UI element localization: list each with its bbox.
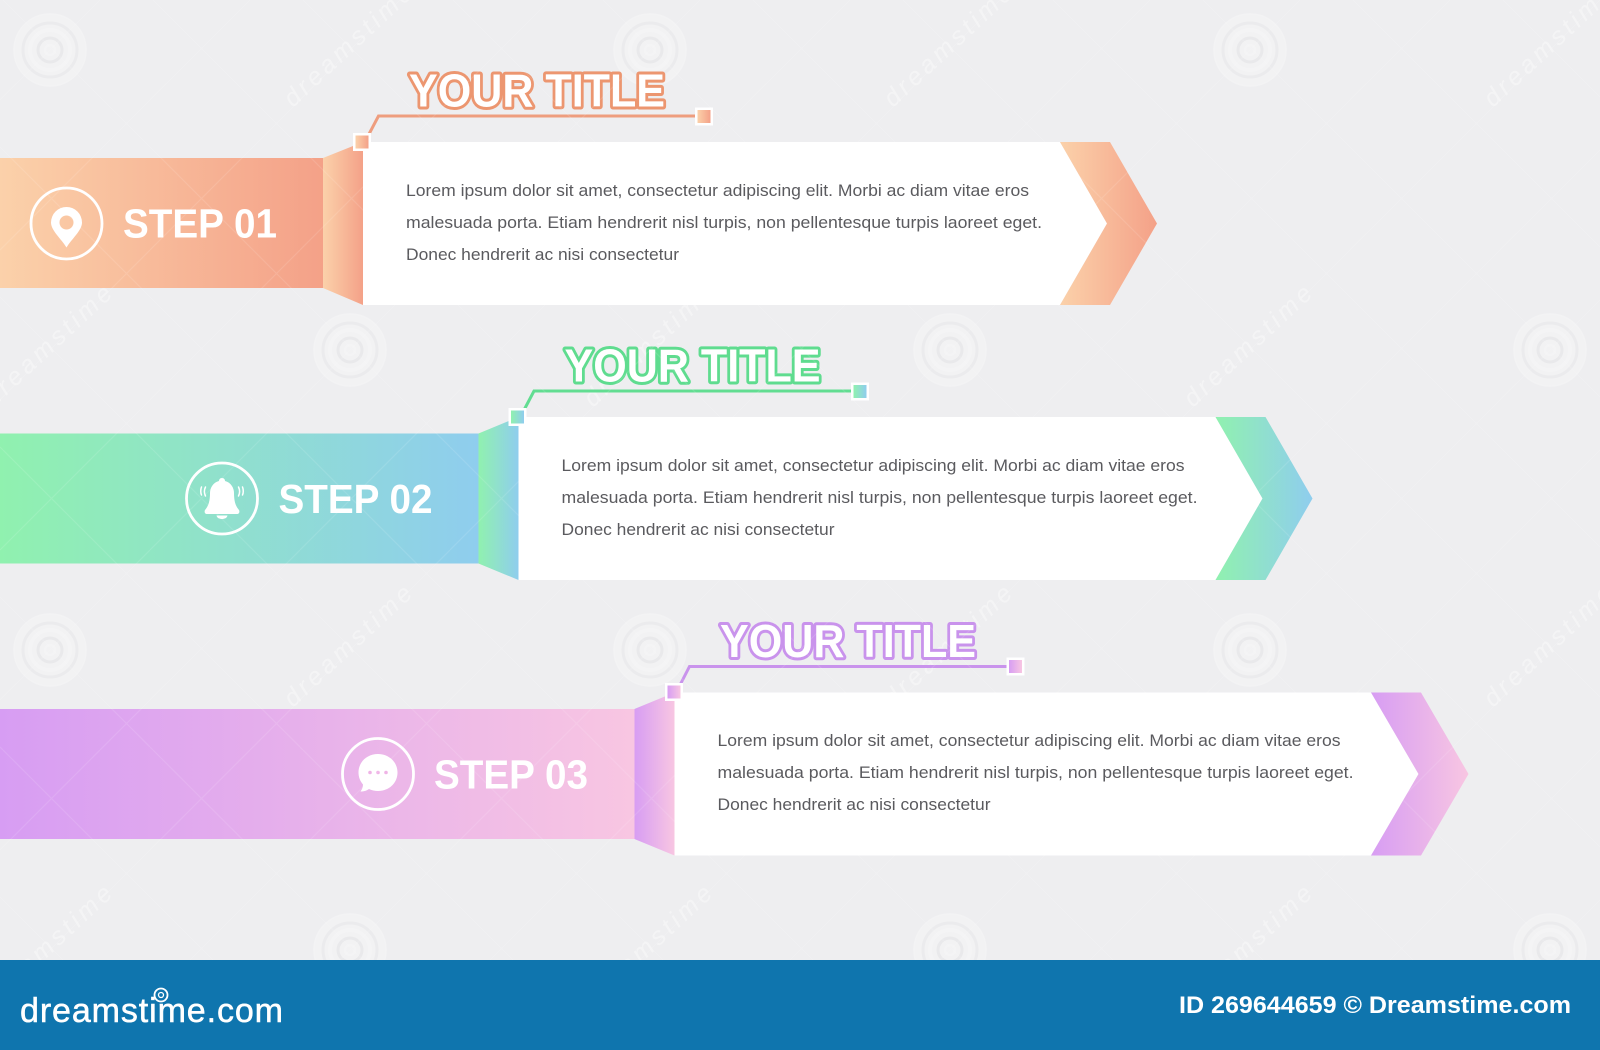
step 02 body text bbox=[562, 456, 1198, 539]
step 02 text card bbox=[518, 417, 1262, 580]
step 01 body text: malesuada porta. Etiam hendrerit nisl turpis, non pellentesque turpis laoreet eget. bbox=[406, 213, 1042, 232]
step 03 title: YOUR TITLE bbox=[720, 615, 976, 667]
step 03 band bbox=[0, 709, 634, 839]
step 01 title: YOUR TITLE bbox=[409, 64, 665, 116]
watermark pattern: dreamstime bbox=[578, 879, 718, 1012]
watermark pattern: dreamstime bbox=[1178, 879, 1318, 1012]
step 02 connector bbox=[508, 382, 869, 426]
icon: bell bbox=[186, 463, 258, 534]
step 03 body text bbox=[718, 731, 1354, 814]
step 02 fold bbox=[478, 417, 518, 580]
icon: location pin bbox=[31, 188, 102, 259]
step 03 connector bbox=[665, 658, 1024, 701]
step 03 body text: malesuada porta. Etiam hendrerit nisl turpis, non pellentesque turpis laoreet eget. bbox=[718, 763, 1354, 782]
step 02 arrow bbox=[1216, 417, 1312, 580]
step 03 arrow bbox=[1371, 692, 1468, 856]
step 02 title: YOUR TITLE bbox=[564, 340, 820, 392]
step 03 body text: Lorem ipsum dolor sit amet, consectetur adipiscing elit. Morbi ac diam vitae eros bbox=[718, 731, 1340, 750]
step 01 body text: Donec hendrerit ac nisi consectetur bbox=[406, 245, 679, 264]
watermark pattern: dreamstime bbox=[278, 579, 418, 712]
panel: step 01 bbox=[0, 64, 1157, 305]
panel: step 02 bbox=[0, 340, 1312, 580]
step 01 arrow bbox=[1060, 142, 1157, 305]
footer bar bbox=[0, 960, 1600, 1050]
step 01 band bbox=[0, 158, 323, 288]
step 02 label: STEP 02 bbox=[278, 476, 432, 522]
step 02 body text: malesuada porta. Etiam hendrerit nisl turpis, non pellentesque turpis laoreet eget. bbox=[562, 488, 1198, 507]
step 02 body text: Donec hendrerit ac nisi consectetur bbox=[562, 520, 835, 539]
watermark pattern: dreamstime bbox=[578, 279, 718, 412]
footer image id: ID 269644659 © Dreamstime.com bbox=[1179, 992, 1571, 1019]
panel: step 03 bbox=[0, 615, 1468, 856]
step 02 body text: Lorem ipsum dolor sit amet, consectetur adipiscing elit. Morbi ac diam vitae eros bbox=[562, 456, 1184, 475]
step 02 band bbox=[0, 434, 478, 564]
step 01 connector bbox=[353, 108, 713, 151]
step 03 text card bbox=[674, 692, 1418, 856]
step 01 text card bbox=[363, 142, 1107, 305]
icon: chat bubble bbox=[342, 738, 414, 810]
step 01 label: STEP 01 bbox=[123, 200, 277, 246]
watermark pattern: dreamstime bbox=[1178, 279, 1318, 412]
footer logo: dreamstime.com bbox=[20, 992, 283, 1030]
step 03 label: STEP 03 bbox=[434, 752, 588, 798]
step 01 fold bbox=[323, 142, 363, 305]
step 01 body text bbox=[406, 181, 1042, 264]
step 03 fold bbox=[634, 692, 674, 856]
watermark pattern: dreamstime bbox=[878, 579, 1018, 712]
step 03 body text: Donec hendrerit ac nisi consectetur bbox=[718, 795, 991, 814]
step 01 body text: Lorem ipsum dolor sit amet, consectetur adipiscing elit. Morbi ac diam vitae eros bbox=[406, 181, 1029, 200]
